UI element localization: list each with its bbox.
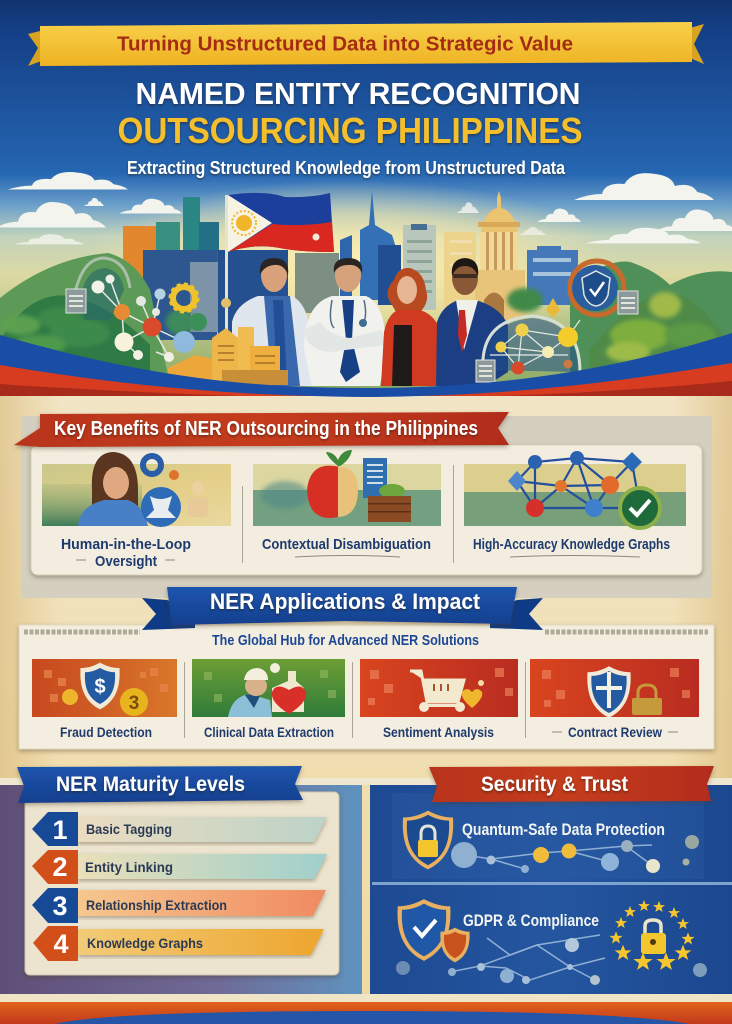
person: man in lab coat	[232, 258, 314, 386]
top banner	[28, 22, 704, 66]
panel: security and trust	[370, 785, 732, 994]
people	[232, 258, 508, 386]
panel: maturity levels	[0, 778, 732, 994]
level 3	[32, 888, 326, 923]
level 2: 2	[52, 852, 68, 882]
title line 2: OUTSOURCING PHILIPPINES	[118, 110, 582, 151]
level 3: Relationship Extraction	[86, 897, 227, 913]
level 1: Basic Tagging	[86, 821, 172, 837]
benefits card	[31, 445, 702, 575]
heading ribbon: maturity levels	[17, 766, 303, 803]
level 4: 4	[53, 929, 69, 959]
item: gdpr and compliance: GDPR & Compliance	[463, 911, 599, 930]
application: fraud detection: $	[94, 676, 106, 698]
hero illustration	[0, 0, 732, 397]
application: fraud detection: 3	[129, 693, 139, 714]
application labels	[60, 724, 678, 740]
application: fraud detection	[32, 659, 177, 717]
ribbon text: Security & Trust	[481, 773, 628, 796]
clouds	[0, 172, 732, 244]
gold buildings	[168, 327, 288, 385]
green hills and trees	[0, 253, 732, 385]
heading ribbon: applications	[142, 587, 543, 630]
benefit: knowledge graph	[464, 451, 686, 528]
level 2	[32, 850, 327, 884]
shield emblem	[570, 261, 638, 315]
subheading: The Global Hub for Advanced NER Solutions	[212, 632, 479, 649]
main title	[118, 76, 582, 151]
label: human in the loop	[61, 536, 191, 570]
level 4	[33, 926, 324, 961]
right network globe	[476, 298, 580, 382]
Philippine flag	[221, 193, 334, 340]
level 4: Knowledge Graphs	[87, 935, 203, 951]
curved ribbon bands	[0, 333, 732, 397]
application labels: Fraud Detection	[60, 724, 152, 740]
application: contract review	[530, 659, 699, 718]
person: doctor with stethoscope	[304, 258, 386, 386]
ribbon text: Key Benefits of NER Outsourcing in the Philippines	[54, 418, 478, 440]
panel: key benefits	[21, 416, 712, 598]
left data network	[66, 258, 207, 362]
EU stars and lock	[609, 900, 695, 970]
panel: applications	[19, 625, 714, 749]
capitol dome	[475, 191, 525, 320]
item: quantum-safe protection	[403, 811, 699, 873]
subtitle: Extracting Structured Knowledge from Unstructured Data	[127, 158, 566, 178]
label: contextual disambiguation: Contextual Disambiguation	[262, 536, 431, 553]
level 1	[32, 812, 327, 846]
person: woman in red blazer	[381, 268, 445, 386]
ribbon text: NER Applications & Impact	[210, 589, 481, 614]
heading ribbon: security and trust	[429, 766, 714, 802]
application labels: Sentiment Analysis	[383, 724, 494, 740]
application labels: Contract Review	[568, 724, 662, 740]
maturity card	[25, 792, 339, 975]
heading ribbon: key benefits	[14, 412, 509, 447]
level 2: Entity Linking	[85, 859, 173, 875]
application: clinical data	[192, 659, 345, 717]
ribbon text: NER Maturity Levels	[56, 773, 245, 796]
person: man in navy suit	[436, 258, 508, 386]
benefit: human in the loop	[42, 452, 231, 527]
application labels: Clinical Data Extraction	[204, 724, 334, 740]
label: human in the loop: Human-in-the-Loop	[61, 536, 191, 553]
skyline buildings	[123, 190, 578, 340]
footer band	[0, 994, 732, 1024]
application: sentiment analysis	[360, 659, 518, 717]
label: knowledge graphs: High-Accuracy Knowledge Graphs	[473, 536, 670, 553]
benefit: contextual disambiguation	[253, 450, 441, 526]
title line 1: NAMED ENTITY RECOGNITION	[136, 76, 580, 111]
banner text: Turning Unstructured Data into Strategic Value	[117, 34, 573, 56]
level 3: 3	[52, 891, 68, 921]
item: gdpr and compliance	[396, 899, 707, 985]
label: human in the loop: Oversight	[95, 553, 157, 570]
level 1: 1	[52, 815, 68, 845]
item: quantum-safe protection: Quantum-Safe Data Protection	[462, 821, 665, 839]
